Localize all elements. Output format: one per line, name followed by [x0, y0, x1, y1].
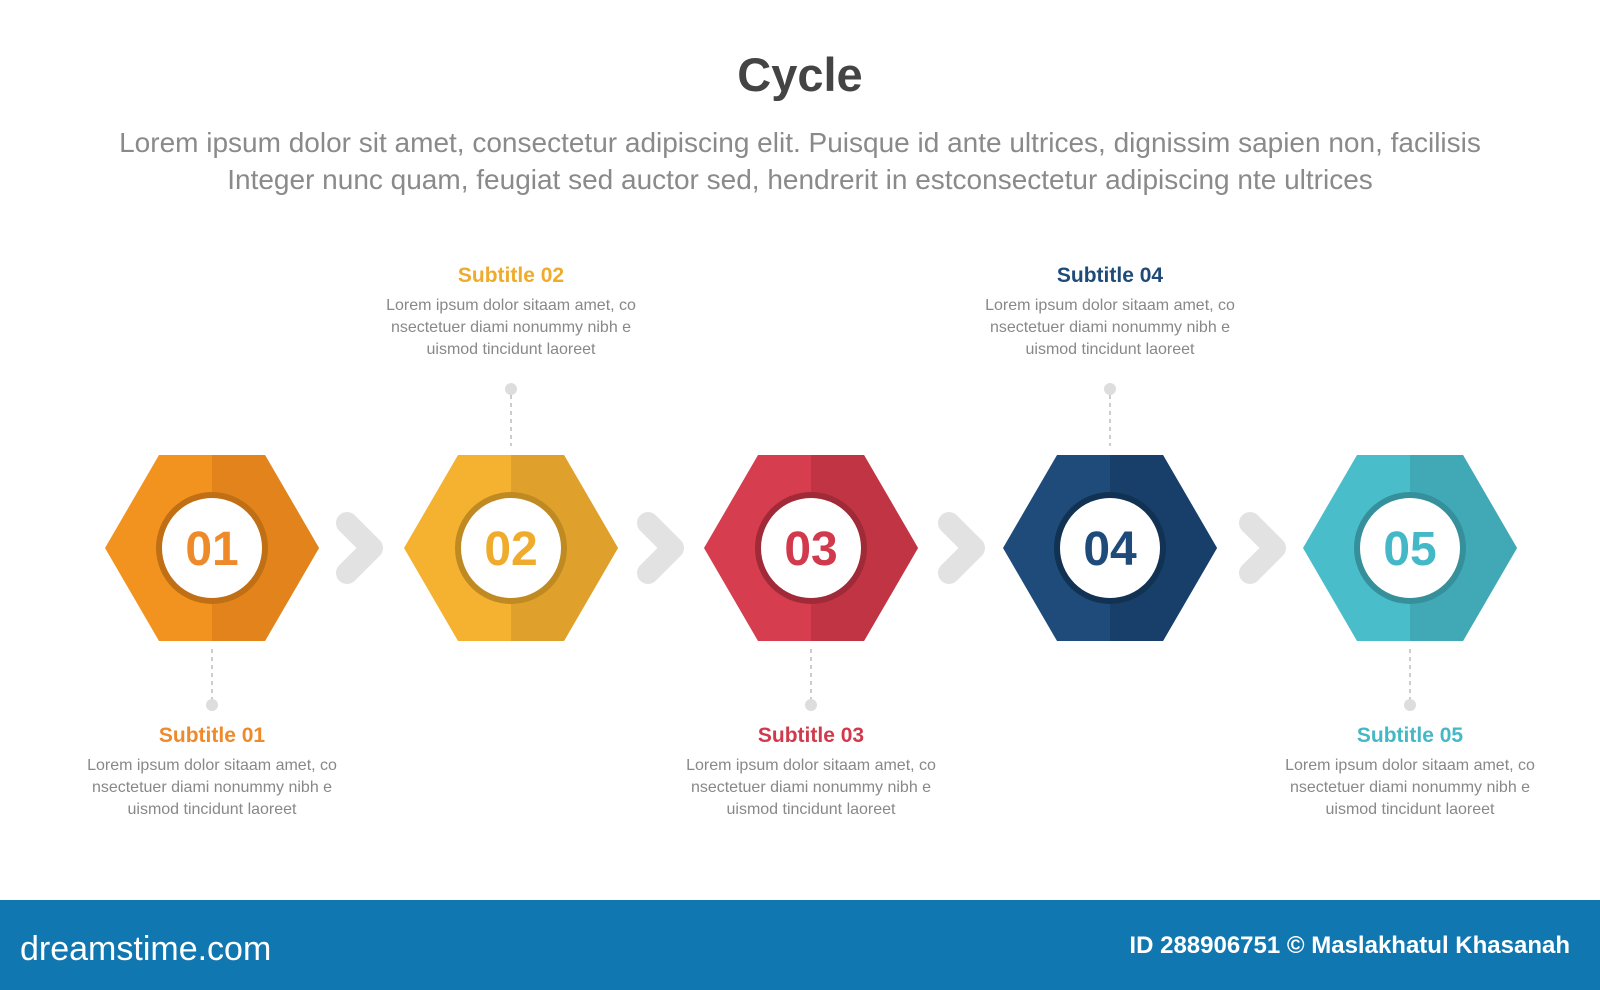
- step 04 text: Subtitle 04: [1057, 264, 1163, 287]
- step 03 text: [686, 724, 936, 818]
- subtitle text: [119, 127, 1481, 195]
- hexagon 01: 01: [185, 523, 239, 576]
- step 03 text: Subtitle 03: [758, 724, 864, 747]
- footer logo: dreamstime.com: [20, 930, 271, 968]
- arrow chevrons: [347, 523, 1275, 573]
- hexagon 03: 03: [784, 523, 838, 576]
- step 05 text: Lorem ipsum dolor sitaam amet, co nsectetuer diami nonummy nibh e uismod tincidunt laoreet: [1285, 757, 1535, 818]
- step 01 text: [87, 724, 337, 818]
- step 02 text: Subtitle 02: [458, 264, 564, 287]
- hexagon 03: [704, 455, 918, 641]
- connectors: [212, 395, 1410, 700]
- footer bar: [0, 900, 1600, 990]
- subtitle text: Integer nunc quam, feugiat sed auctor sed, hendrerit in estconsectetur adipiscing nte ultrices: [227, 164, 1373, 195]
- step 04 text: [985, 264, 1235, 358]
- step 01 text: Lorem ipsum dolor sitaam amet, co nsectetuer diami nonummy nibh e uismod tincidunt laoreet: [87, 757, 337, 818]
- hexagon 05: 05: [1383, 523, 1437, 576]
- step 01 text: Subtitle 01: [159, 724, 265, 747]
- step 02 text: [386, 264, 636, 358]
- hexagon 02: 02: [484, 523, 538, 576]
- hexagon 05: [1303, 455, 1517, 641]
- hexagon 04: [1003, 455, 1217, 641]
- step 02 text: Lorem ipsum dolor sitaam amet, co nsectetuer diami nonummy nibh e uismod tincidunt laoreet: [386, 297, 636, 358]
- hexagon 01: [105, 455, 319, 641]
- subtitle text: Lorem ipsum dolor sit amet, consectetur adipiscing elit. Puisque id ante ultrices, dignissim sapien non, facilisis: [119, 127, 1481, 158]
- step 04 text: Lorem ipsum dolor sitaam amet, co nsectetuer diami nonummy nibh e uismod tincidunt laoreet: [985, 297, 1235, 358]
- footer credit: ID 288906751 © Maslakhatul Khasanah: [1129, 932, 1570, 959]
- step 05 text: [1285, 724, 1535, 818]
- step 03 text: Lorem ipsum dolor sitaam amet, co nsectetuer diami nonummy nibh e uismod tincidunt laoreet: [686, 757, 936, 818]
- hexagon 04: 04: [1083, 523, 1137, 576]
- hexagon 02: [404, 455, 618, 641]
- step 05 text: Subtitle 05: [1357, 724, 1463, 747]
- title: Cycle: [737, 48, 863, 101]
